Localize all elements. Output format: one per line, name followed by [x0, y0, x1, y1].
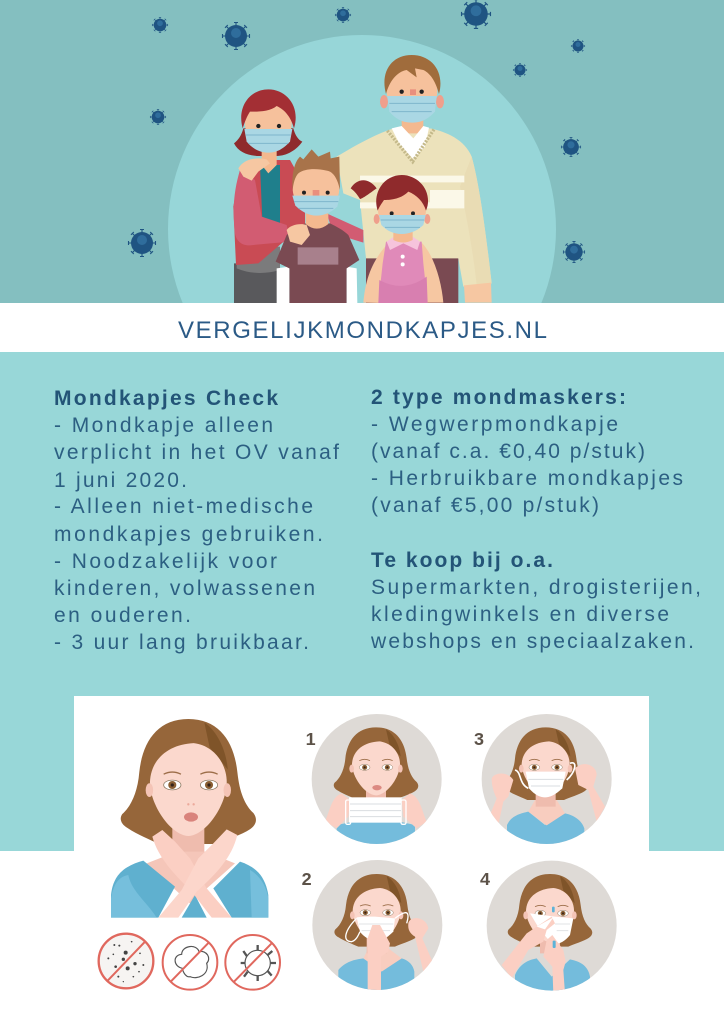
family illustration [233, 55, 492, 303]
step 4: 4 [480, 869, 490, 889]
text column: mask types: (vanaf €5,00 p/stuk) [371, 494, 599, 517]
text column: Mondkapjes Check: - 3 uur lang bruikbaar. [54, 631, 309, 654]
text column: Mondkapjes Check [54, 387, 339, 654]
step 1: 1 [306, 729, 316, 749]
text column: Mondkapjes Check: Mondkapjes Check [54, 387, 278, 410]
mother's hand on boy [287, 224, 310, 245]
text column: where to buy: Supermarkten, drogisterijen, [371, 576, 701, 599]
text column: where to buy: webshops en speciaalzaken. [370, 630, 694, 653]
website banner: VERGELIJKMONDKAPJES.NL [178, 317, 547, 344]
step 3: 3 [474, 729, 484, 749]
text column: Mondkapjes Check: mondkapjes gebruiken. [54, 523, 323, 546]
father's hand on shoulder [238, 158, 270, 181]
text column: Mondkapjes Check: kinderen, volwassenen [54, 577, 315, 600]
father [337, 55, 492, 303]
text column: Mondkapjes Check: - Alleen niet-medische [54, 495, 313, 518]
text column: Mondkapjes Check: - Noodzakelijk voor [54, 550, 277, 573]
prohibited icons [99, 934, 280, 990]
woman crossing arms [111, 719, 268, 918]
hero background [0, 0, 724, 303]
text column: where to buy: Te koop bij o.a. [371, 549, 553, 572]
icon: no virus [225, 935, 280, 990]
text column: mask types: - Wegwerpmondkapje [371, 413, 618, 436]
text column: Mondkapjes Check: - Mondkapje alleen [54, 414, 273, 437]
step 2 [302, 860, 442, 993]
text column: where to buy: kledingwinkels en diverse [371, 603, 669, 626]
text column: Mondkapjes Check: verplicht in het OV vanaf [54, 441, 339, 464]
text column: Mondkapjes Check: en ouderen. [54, 604, 191, 627]
text column: mask types: - Herbruikbare mondkapjes [371, 467, 683, 490]
step 3 [474, 714, 612, 847]
info panel [0, 352, 724, 851]
text column: where to buy [370, 549, 701, 653]
mask steps [302, 714, 617, 993]
viruses [128, 0, 585, 263]
instruction card [74, 696, 649, 1024]
text column: Mondkapjes Check: 1 juni 2020. [54, 469, 187, 492]
step 1 [306, 714, 442, 847]
text column: mask types: 2 type mondmaskers: [371, 386, 626, 409]
mother [233, 89, 305, 303]
hero circle [168, 35, 556, 303]
website banner [0, 303, 724, 352]
step 4 [480, 861, 617, 993]
icon: no smoke cloud [163, 935, 217, 990]
boy [276, 149, 363, 303]
icon: no dust [99, 934, 153, 988]
girl [351, 175, 443, 303]
step 2: 2 [302, 869, 312, 889]
text column: mask types [371, 386, 683, 517]
text column: mask types: (vanaf c.a. €0,40 p/stuk) [371, 440, 645, 463]
